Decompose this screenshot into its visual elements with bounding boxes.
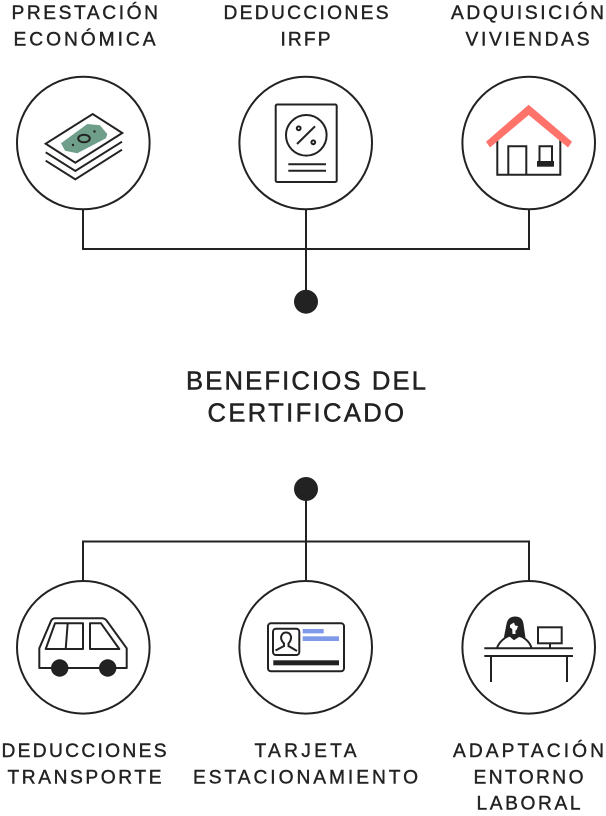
label: adaptación entorno laboral: ADAPTACIÓN: [453, 740, 604, 762]
icon: house: [486, 105, 572, 175]
icon: van: [39, 618, 127, 677]
label: tarjeta estacionamiento: TARJETA: [254, 741, 357, 762]
label: tarjeta estacionamiento: [193, 741, 418, 788]
icon: person at desk: [484, 616, 573, 682]
label: adaptación entorno laboral: LABORAL: [476, 794, 581, 814]
icon: ID card: [268, 623, 344, 671]
bottom connector: [83, 477, 529, 581]
label: deducciones transporte: DEDUCCIONES: [2, 741, 166, 762]
label: deducciones transporte: [2, 741, 166, 788]
circle: tarjeta estacionamiento: [239, 581, 372, 714]
label: prestación económica: [12, 2, 158, 50]
label: deducciones transporte: TRANSPORTE: [8, 768, 162, 788]
label: prestación económica: ECONÓMICA: [14, 28, 156, 50]
top connector: [83, 209, 529, 314]
circle: adaptación entorno laboral: [462, 581, 595, 714]
label: prestación económica: PRESTACIÓN: [12, 2, 158, 24]
circle: adquisición viviendas: [462, 77, 595, 209]
label: adquisición viviendas: ADQUISICIÓN: [451, 2, 604, 24]
circle: deducciones transporte: [17, 581, 150, 714]
label: deducciones IRFP: DEDUCCIONES: [224, 3, 388, 24]
label: adquisición viviendas: [451, 2, 604, 50]
label: deducciones IRFP: IRFP: [280, 30, 330, 50]
icon: percent document: [276, 104, 337, 182]
label: deducciones IRFP: [224, 3, 388, 50]
title: [186, 368, 426, 428]
label: adaptación entorno laboral: [453, 740, 604, 814]
circle: deducciones IRFP: [239, 77, 372, 209]
label: adquisición viviendas: VIVIENDAS: [466, 30, 590, 50]
title: CERTIFICADO: [208, 400, 404, 428]
circle: prestación económica: [17, 77, 150, 209]
title: BENEFICIOS DEL: [186, 368, 426, 396]
icon: stack of banknotes: [46, 114, 122, 179]
label: adaptación entorno laboral: ENTORNO: [474, 768, 584, 788]
label: tarjeta estacionamiento: ESTACIONAMIENTO: [193, 768, 418, 788]
